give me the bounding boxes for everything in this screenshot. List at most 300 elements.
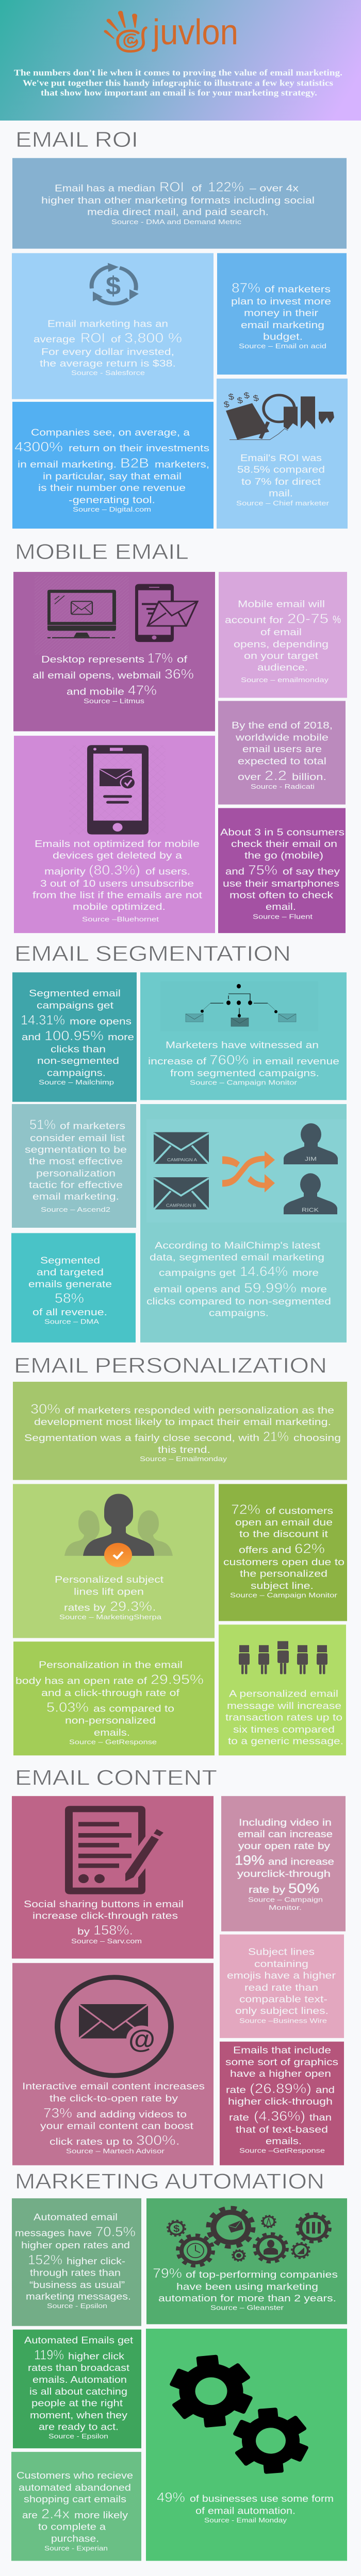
text: emojis stat: emojis have a higher bbox=[227, 1971, 336, 1981]
heading: mobile email: MOBILE EMAIL bbox=[15, 539, 189, 564]
panel: 58 percent of revenue bbox=[11, 1233, 136, 1343]
text: revenue share stat: 58% bbox=[55, 1291, 84, 1306]
text: abandoned cart stat: shopping cart emails bbox=[24, 2494, 126, 2505]
text: mobile opens stat: opens, depending bbox=[234, 639, 329, 650]
text: subject lines stat: rates by bbox=[64, 1603, 106, 1613]
text: list segmentation stat: consider email list bbox=[30, 1133, 125, 1144]
text: mobile users stat: expected to total bbox=[238, 756, 326, 767]
text: list segmentation stat: of marketers bbox=[60, 1121, 125, 1131]
text: interactive content stat: 300%. bbox=[136, 2133, 180, 2147]
text: discount stat: 72% bbox=[231, 1502, 260, 1517]
text: transaction rates stat bbox=[225, 1689, 343, 1747]
text: average roi stat bbox=[34, 319, 182, 377]
text: click rates stat: Automated Emails get bbox=[24, 2335, 134, 2346]
icon: segmentation tree bbox=[160, 981, 318, 1031]
text: consumers on the go stat: email. bbox=[266, 902, 296, 912]
text: opens by device: 36% bbox=[165, 667, 194, 682]
text: list segmentation stat: personalization bbox=[36, 1168, 116, 1179]
panel: 760 percent revenue bbox=[140, 972, 347, 1100]
text: mobile opens stat: on your target bbox=[244, 651, 319, 662]
text: graphics stat: rate bbox=[226, 2085, 246, 2095]
text: opens by device: and mobile bbox=[67, 687, 124, 697]
text: discount stat: subject line. bbox=[251, 1581, 314, 1591]
text: body personalization stat: 29.95% bbox=[151, 1672, 204, 1687]
text: interactive content stat: Source – Martech Advisor bbox=[66, 2147, 165, 2155]
text: list segmentation stat: email marketing. bbox=[32, 1192, 119, 1202]
text: 4300 percent stat: is their number one revenue bbox=[38, 483, 186, 494]
text: video stat: 19% bbox=[235, 1853, 265, 1868]
icon: dollar cycle: $ bbox=[106, 272, 121, 300]
text: body personalization stat: Personalization in the email bbox=[39, 1660, 183, 1670]
text: emojis stat: Subject lines bbox=[248, 1947, 315, 1957]
text: video stat: your open rate by bbox=[238, 1841, 330, 1852]
panel: 58.5 percent roi bbox=[217, 379, 348, 529]
text: personalization trend stat: Source – Emailmonday bbox=[140, 1455, 227, 1463]
icon: gears cluster bbox=[167, 2208, 330, 2266]
text: segmented opens stat: 100.95% bbox=[44, 1028, 104, 1043]
text: automated messages stat bbox=[15, 2212, 136, 2310]
text: click rates stat: rates than broadcast bbox=[28, 2363, 130, 2374]
text: mobile opens stat: of email bbox=[260, 627, 302, 638]
text: email automation stat: of email automation. bbox=[195, 2506, 296, 2516]
text: subject lines stat bbox=[55, 1574, 164, 1621]
text: emojis stat bbox=[227, 1947, 336, 2024]
text: click rates stat bbox=[24, 2335, 134, 2440]
text: revenue share stat: emails generate bbox=[28, 1279, 112, 1290]
text: click rates stat: is all about catching bbox=[29, 2386, 127, 2397]
text: email automation stat: 49% bbox=[157, 2490, 185, 2505]
panel: 49 percent of businesses bbox=[146, 2329, 347, 2561]
text: revenue stat: in email revenue bbox=[253, 1056, 339, 1066]
icon: card magnifier and bars: $ bbox=[252, 393, 259, 403]
text: body personalization stat bbox=[15, 1660, 204, 1745]
intro text: that show how important an email is for your marketing strategy. bbox=[41, 88, 317, 97]
panel: including video bbox=[221, 1796, 346, 1931]
text: opens by device: 17% bbox=[147, 651, 173, 666]
text: interactive content stat: the click-to-open rate by bbox=[50, 2093, 178, 2104]
text: interactive content stat: Interactive email content increases bbox=[22, 2081, 205, 2092]
heading: email content: EMAIL CONTENT bbox=[15, 1765, 217, 1790]
text: list segmentation stat: 51% bbox=[29, 1117, 56, 1132]
text: mobile opens stat: % bbox=[333, 614, 341, 625]
text: median roi stat: of bbox=[192, 183, 202, 194]
text: opens by device: Source – Litmus bbox=[84, 697, 144, 705]
icon: shuffle arrows bbox=[222, 1151, 275, 1193]
text: consumers on the go stat: most often to check bbox=[229, 890, 333, 901]
text: mailchimp stat bbox=[146, 1241, 331, 1318]
heading: email segmentation: EMAIL SEGMENTATION bbox=[14, 941, 291, 965]
text: graphics stat: rate bbox=[229, 2112, 249, 2123]
panel: interactive email content bbox=[12, 1963, 214, 2165]
text: graphics stat: Source –GetResponse bbox=[239, 2146, 325, 2154]
text: opens by device: of bbox=[177, 654, 188, 665]
icon: campaign envelopes: CAMPAIGN B bbox=[166, 1203, 196, 1208]
text: mailchimp stat: data, segmented email marketing bbox=[150, 1252, 324, 1263]
text: median roi stat: – over 4x bbox=[250, 183, 299, 194]
text: revenue stat: increase of bbox=[148, 1056, 207, 1066]
text: video stat: Including video in bbox=[239, 1818, 332, 1828]
text: mailchimp stat: campaigns get bbox=[159, 1268, 236, 1278]
text: average roi stat: For every dollar invested, bbox=[41, 347, 174, 358]
text: mailchimp stat: campaigns. bbox=[209, 1308, 269, 1318]
text: top performers stat: have been using marketing bbox=[176, 2282, 318, 2292]
text: top performers stat bbox=[153, 2266, 338, 2311]
text: video stat: and increase bbox=[268, 1857, 334, 1867]
panel: mobile 20-75 percent bbox=[219, 572, 347, 698]
text: opens by device: all email opens, webmail bbox=[32, 670, 161, 681]
text: mobile optimization stat: Source –Bluehornet bbox=[82, 916, 159, 923]
panel: median roi bbox=[12, 158, 347, 249]
text: mobile optimization stat: mobile optimized. bbox=[73, 902, 166, 912]
text: median roi stat: Email has a median bbox=[55, 183, 155, 194]
text: discount stat: the personalized bbox=[240, 1569, 327, 1579]
text: click rates stat: emails. Automation bbox=[32, 2375, 127, 2385]
text: email automation stat bbox=[157, 2490, 334, 2524]
text: mobile optimization stat: majority bbox=[44, 867, 86, 877]
text: top performers stat: Source – Gleanster bbox=[210, 2303, 284, 2311]
text: graphics stat: than bbox=[309, 2112, 332, 2123]
text: abandoned cart stat: more likely bbox=[74, 2510, 128, 2521]
logo: juvlon bbox=[104, 11, 238, 52]
text: segmented opens stat: campaigns. bbox=[47, 1068, 106, 1078]
text: social sharing stat: Source – Sarv.com bbox=[71, 1937, 142, 1945]
text: abandoned cart stat: to complete a bbox=[38, 2522, 106, 2532]
text: segmented opens stat: campaigns get bbox=[37, 1001, 114, 1011]
text: mobile optimization stat bbox=[32, 839, 203, 923]
text: mobile opens stat: audience. bbox=[257, 663, 308, 673]
panel: 2.2 billion users bbox=[218, 701, 346, 805]
panel: segmented campaigns opens bbox=[12, 972, 137, 1102]
text: video stat: Source – Campaign bbox=[248, 1895, 323, 1903]
panel: average roi 3800 bbox=[12, 253, 214, 399]
text: abandoned cart stat: purchase. bbox=[51, 2534, 99, 2544]
text: abandoned cart stat: Customers who recieve bbox=[17, 2470, 133, 2481]
text: emojis stat: read rate than bbox=[244, 1982, 318, 1993]
panel: 79 percent top performers bbox=[146, 2198, 347, 2324]
text: interactive content stat: click rates up to bbox=[50, 2137, 133, 2147]
text: segmented opens stat bbox=[21, 988, 134, 1086]
text: abandoned cart stat bbox=[17, 2470, 133, 2552]
text: 4300 percent stat: return on their investments bbox=[69, 443, 209, 454]
text: consumers on the go stat: and bbox=[225, 867, 244, 877]
text: mobile users stat: Source - Radicati bbox=[251, 783, 315, 790]
text: mobile users stat: By the end of 2018, bbox=[232, 720, 333, 731]
text: 4300 percent stat bbox=[14, 428, 209, 513]
text: 87 percent stat: money in their bbox=[244, 308, 319, 318]
panel: 3 in 5 consumers bbox=[218, 808, 346, 933]
panel: desktop webmail mobile opens bbox=[13, 572, 215, 731]
text: click rates stat: higher click bbox=[68, 2351, 124, 2362]
icon: phone with envelope bbox=[135, 584, 198, 642]
icon: envelope with at sign in ring bbox=[58, 1977, 171, 2076]
panel: abandoned cart emails bbox=[11, 2452, 141, 2561]
text: consumers on the go stat: 75% bbox=[248, 862, 277, 877]
text: emojis stat: containing bbox=[254, 1959, 308, 1970]
text: subject lines stat: 29.3%. bbox=[110, 1599, 156, 1614]
text: personalization trend stat: this trend. bbox=[158, 1445, 210, 1455]
text: discount stat bbox=[223, 1502, 344, 1599]
text: 4300 percent stat: Source – Digital.com bbox=[73, 505, 151, 513]
text: list segmentation stat bbox=[25, 1117, 127, 1213]
text: mobile optimization stat: devices get deleted by a bbox=[53, 851, 182, 861]
text: segmented opens stat: non-segmented bbox=[37, 1056, 119, 1066]
text: click rates stat: people at the right bbox=[31, 2398, 123, 2409]
text: mobile users stat: email users are bbox=[242, 744, 322, 755]
icon: campaign envelopes: CAMPAIGN A bbox=[167, 1157, 198, 1162]
icon: phone with checked envelope bbox=[87, 745, 149, 835]
text: personalization trend stat: 21% bbox=[263, 1429, 289, 1444]
text: mobile opens stat: Mobile email will bbox=[238, 599, 325, 609]
icon: row of five people bbox=[239, 1641, 327, 1674]
text: 87 percent stat bbox=[231, 280, 331, 350]
text: revenue stat: from segmented campaigns. bbox=[170, 1069, 319, 1079]
text: social sharing stat: 158%. bbox=[93, 1923, 133, 1937]
text: automated messages stat: marketing messages. bbox=[26, 2292, 131, 2302]
panel: personalized subject lines bbox=[13, 1484, 215, 1638]
text: 4300 percent stat: 4300% bbox=[14, 439, 63, 454]
text: body personalization stat: body has an open rate of bbox=[15, 1676, 147, 1686]
text: automated messages stat: 152% bbox=[28, 2252, 62, 2267]
text: email roi comparison bbox=[236, 453, 329, 507]
text: top performers stat: automation for more than 2 years. bbox=[158, 2293, 336, 2304]
text: segmented opens stat: and bbox=[22, 1032, 41, 1043]
text: automated messages stat: 70.5% bbox=[95, 2224, 136, 2239]
text: personalization trend stat: choosing bbox=[293, 1433, 341, 1444]
text: mobile users stat bbox=[232, 720, 333, 790]
text: revenue share stat: Segmented bbox=[40, 1256, 100, 1266]
text: top performers stat: 79% bbox=[153, 2266, 182, 2281]
text: 87 percent stat: 87% bbox=[232, 280, 260, 295]
text: discount stat: open an email due bbox=[235, 1517, 333, 1528]
panel: 72 percent of customers bbox=[219, 1484, 347, 1621]
text: automated messages stat: “business as usual” bbox=[29, 2280, 125, 2291]
text: median roi stat: media direct mail, and paid search. bbox=[87, 207, 269, 217]
text: email roi comparison: 58.5% compared bbox=[237, 465, 325, 475]
panel: personalization in body bbox=[13, 1641, 215, 1755]
text: abandoned cart stat: are bbox=[22, 2510, 38, 2521]
text: video stat: 50% bbox=[288, 1881, 319, 1896]
text: discount stat: Source – Campaign Monitor bbox=[230, 1591, 337, 1599]
text: 87 percent stat: Source – Email on acid bbox=[239, 342, 326, 350]
icon: card magnifier and bars: $ bbox=[236, 395, 243, 405]
text: automated messages stat: Source - Epsilon bbox=[47, 2302, 107, 2310]
text: discount stat: of customers bbox=[266, 1506, 333, 1516]
text: emojis stat: Source –Business Wire bbox=[239, 2016, 327, 2024]
intro text bbox=[14, 68, 342, 97]
text: email automation stat: Source - Email Monday bbox=[204, 2516, 287, 2524]
panel: 87 percent of marketers bbox=[217, 253, 347, 375]
panel: six times transaction rates bbox=[219, 1624, 346, 1755]
text: mobile optimization stat: Emails not optimized for mobile bbox=[35, 839, 200, 849]
intro text: We've put together this handy infographic to illustrate a few key statistics bbox=[23, 78, 333, 88]
text: personalization trend stat: 30% bbox=[30, 1401, 60, 1416]
text: body personalization stat: Source – GetResponse bbox=[69, 1738, 157, 1745]
text: 4300 percent stat: marketers, bbox=[155, 460, 209, 470]
text: emojis stat: only subject lines. bbox=[235, 2006, 329, 2016]
text: automated messages stat: through rates than bbox=[30, 2268, 121, 2278]
text: mailchimp stat: email opens and bbox=[154, 1284, 240, 1295]
text: mobile users stat: billion. bbox=[292, 772, 326, 782]
text: social sharing stat bbox=[24, 1899, 184, 1945]
icon: recipients jim and rick: RICK bbox=[302, 1207, 319, 1213]
text: discount stat: customers open due to bbox=[223, 1557, 344, 1568]
text: revenue stat: Source – Campaign Monitor bbox=[190, 1079, 297, 1086]
text: discount stat: 62% bbox=[294, 1541, 325, 1556]
text: median roi stat: higher than other marketing formats including social bbox=[41, 195, 315, 206]
icon: recipients jim and rick bbox=[284, 1123, 338, 1214]
text: average roi stat: the average return is $38. bbox=[40, 359, 176, 369]
text: segmented opens stat: more bbox=[108, 1032, 134, 1043]
text: video stat: yourclick-through bbox=[237, 1869, 331, 1879]
text: revenue stat: Marketers have witnessed an bbox=[166, 1040, 319, 1050]
icon: card magnifier and bars: $ bbox=[243, 391, 250, 400]
text: body personalization stat: emails. bbox=[94, 1727, 130, 1738]
text: consumers on the go stat: check their email on bbox=[231, 839, 337, 849]
text: consumers on the go stat bbox=[220, 827, 344, 920]
text: 87 percent stat: of marketers bbox=[265, 284, 331, 295]
text: revenue share stat: Source – DMA bbox=[44, 1317, 100, 1325]
text: abandoned cart stat: 2.4x bbox=[41, 2506, 70, 2521]
text: consumers on the go stat: Source – Fluent bbox=[253, 912, 313, 920]
icon: dollar cycle bbox=[92, 263, 139, 303]
intro text: The numbers don't lie when it comes to proving the value of email marketing. bbox=[14, 68, 342, 77]
text: email roi comparison: to 7% for direct bbox=[241, 477, 321, 487]
text: email roi comparison: mail. bbox=[269, 488, 293, 499]
text: subject lines stat: lines lift open bbox=[74, 1587, 144, 1597]
panel: 51 percent of marketers bbox=[12, 1104, 136, 1228]
icon: card magnifier and bars: $ bbox=[223, 399, 230, 410]
text: click rates stat: Source - Epsilon bbox=[48, 2432, 108, 2440]
text: abandoned cart stat: automated abandoned bbox=[19, 2483, 131, 2493]
text: click rates stat: 119% bbox=[34, 2348, 64, 2362]
text: email roi comparison: Source – Chief marketer bbox=[236, 499, 329, 507]
heading: email personalization: EMAIL PERSONALIZATION bbox=[14, 1353, 327, 1378]
text: interactive content stat: 73% bbox=[43, 2106, 72, 2121]
text: transaction rates stat: A personalized email bbox=[229, 1689, 338, 1699]
text: mailchimp stat: clicks compared to non-segmented bbox=[146, 1296, 331, 1307]
text: abandoned cart stat: Source - Experian bbox=[44, 2545, 108, 2552]
text: segmented opens stat: clicks than bbox=[51, 1044, 106, 1055]
text: graphics stat bbox=[225, 2045, 338, 2154]
text: average roi stat: Email marketing has an bbox=[47, 319, 168, 329]
text: revenue share stat: and targeted bbox=[37, 1267, 104, 1278]
text: mailchimp stat: 14.64% bbox=[240, 1264, 288, 1279]
text: automated messages stat: higher open rates and bbox=[21, 2240, 130, 2251]
icon: desktop with envelope bbox=[47, 590, 116, 638]
text: body personalization stat: non-personalized bbox=[65, 1716, 156, 1726]
text: video stat: Monitor. bbox=[269, 1904, 302, 1911]
text: revenue stat: 760% bbox=[209, 1053, 249, 1067]
text: transaction rates stat: six times compared bbox=[233, 1724, 335, 1735]
panel: automated emails 119 percent bbox=[13, 2330, 141, 2448]
text: personalization trend stat: development most likely to impact their email marketing. bbox=[34, 1417, 331, 1428]
text: video stat: rate by bbox=[249, 1885, 285, 1895]
text: mobile users stat: over bbox=[238, 772, 261, 782]
text: automated messages stat: messages have bbox=[15, 2228, 92, 2239]
text: social sharing stat: by bbox=[77, 1926, 90, 1937]
text: discount stat: offers and bbox=[239, 1545, 291, 1555]
panel: automated email messages bbox=[12, 2198, 141, 2326]
panel: 4300 percent return bbox=[12, 402, 214, 529]
text: discount stat: to the discount it bbox=[239, 1529, 329, 1539]
text: mailchimp stat: 59.99% bbox=[244, 1281, 297, 1295]
text: list segmentation stat: segmentation to be bbox=[25, 1145, 127, 1155]
text: median roi stat: 122% bbox=[208, 180, 244, 194]
text: consumers on the go stat: use their smartphones bbox=[223, 878, 339, 889]
text: graphics stat: Emails that include bbox=[233, 2045, 331, 2056]
icon: gears cluster: $ bbox=[173, 2223, 180, 2234]
text: median roi stat: ROI bbox=[159, 180, 184, 194]
text: click rates stat: are ready to act. bbox=[39, 2422, 119, 2432]
text: median roi stat bbox=[41, 180, 315, 226]
text: interactive content stat: your email content can boost bbox=[40, 2121, 194, 2131]
text: median roi stat: Source - DMA and Demand Metric bbox=[111, 218, 241, 226]
panel: mailchimp data bbox=[140, 1104, 347, 1343]
heading: marketing automation: MARKETING AUTOMATION bbox=[15, 2169, 324, 2193]
icon: people with check badge bbox=[64, 1494, 173, 1567]
text: mailchimp stat: According to MailChimp's latest bbox=[155, 1241, 321, 1251]
icon: recipients jim and rick: JIM bbox=[305, 1156, 317, 1162]
text: revenue share stat bbox=[28, 1256, 112, 1325]
icon: card magnifier and bars bbox=[223, 391, 334, 440]
heading: email roi: EMAIL ROI bbox=[15, 127, 138, 151]
text: average roi stat: average bbox=[34, 334, 75, 345]
text: graphics stat: higher click-through bbox=[228, 2096, 333, 2107]
text: average roi stat: Source - Salesforce bbox=[71, 369, 145, 377]
text: graphics stat: some sort of graphics bbox=[225, 2057, 338, 2067]
text: mobile opens stat: Source – emailmonday bbox=[241, 676, 329, 684]
text: interactive content stat bbox=[22, 2081, 205, 2155]
text: 4300 percent stat: -generating tool. bbox=[69, 495, 155, 505]
text: transaction rates stat: to a generic message. bbox=[228, 1736, 343, 1747]
text: mobile optimization stat: of users. bbox=[145, 867, 190, 877]
text: opens by device bbox=[32, 651, 194, 705]
text: revenue share stat: of all revenue. bbox=[32, 1307, 107, 1317]
text: segmented opens stat: Source – Mailchimp bbox=[39, 1078, 114, 1086]
text: body personalization stat: 5.03% bbox=[46, 1700, 89, 1715]
text: body personalization stat: as compared to bbox=[93, 1704, 174, 1714]
logo: juvlon: juvlon bbox=[152, 12, 238, 52]
text: mobile opens stat bbox=[225, 599, 341, 684]
panel: subject lines with emojis bbox=[220, 1935, 344, 2038]
text: social sharing stat: increase click-through rates bbox=[32, 1911, 178, 1921]
panel: not optimized for mobile bbox=[14, 736, 215, 933]
text: email roi comparison: Email's ROI was bbox=[240, 453, 322, 464]
icon: tablet and pencil bbox=[65, 1806, 163, 1894]
text: mobile opens stat: 20-75 bbox=[287, 612, 329, 626]
text: personalization trend stat: of marketers responded with personalization as the bbox=[64, 1405, 334, 1416]
text: subject lines stat: Source – MarketingSherpa bbox=[59, 1613, 161, 1621]
text: consumers on the go stat: About 3 in 5 consumers bbox=[220, 827, 344, 838]
text: graphics stat: and bbox=[316, 2085, 335, 2095]
panel: emails with graphics bbox=[220, 2042, 344, 2165]
text: 87 percent stat: budget. bbox=[263, 332, 303, 342]
icon: card magnifier and bars: $ bbox=[227, 392, 235, 402]
text: emojis stat: comparable text- bbox=[239, 1994, 327, 2005]
text: opens by device: Desktop represents bbox=[41, 654, 144, 665]
text: average roi stat: 3,800 % bbox=[124, 330, 182, 345]
text: transaction rates stat: message will increase bbox=[227, 1701, 341, 1711]
icon: envelope with at sign in ring: @ bbox=[128, 2025, 155, 2054]
text: top performers stat: of top-performing companies bbox=[186, 2269, 338, 2280]
text: 4300 percent stat: Companies see, on average, a bbox=[31, 428, 190, 438]
header banner bbox=[0, 0, 361, 121]
text: 4300 percent stat: in particular, say that email bbox=[43, 471, 182, 482]
text: mobile users stat: 2.2 bbox=[265, 768, 287, 783]
text: consumers on the go stat: of say they bbox=[283, 867, 340, 877]
text: email automation stat: of businesses use some form bbox=[190, 2494, 334, 2504]
text: graphics stat: that of text-based bbox=[236, 2125, 328, 2135]
